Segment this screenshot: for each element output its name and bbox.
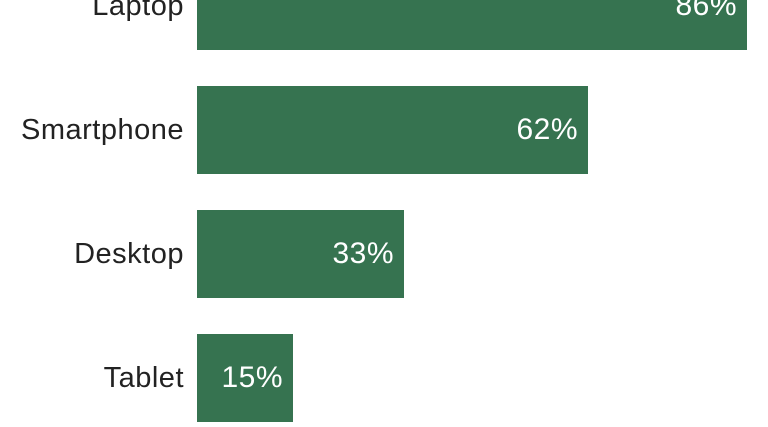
row: Desktop <box>74 210 404 298</box>
row: Desktop: 33% <box>332 237 394 270</box>
row: Tablet: 15% <box>221 361 283 394</box>
row: Smartphone <box>21 86 588 174</box>
row: Tablet: Tablet <box>104 362 184 394</box>
row: Desktop: Desktop <box>74 238 184 270</box>
row: Smartphone: 62% <box>516 113 578 146</box>
row: Laptop <box>92 0 747 50</box>
row: Tablet <box>104 334 293 422</box>
row: Smartphone: Smartphone <box>21 114 184 146</box>
